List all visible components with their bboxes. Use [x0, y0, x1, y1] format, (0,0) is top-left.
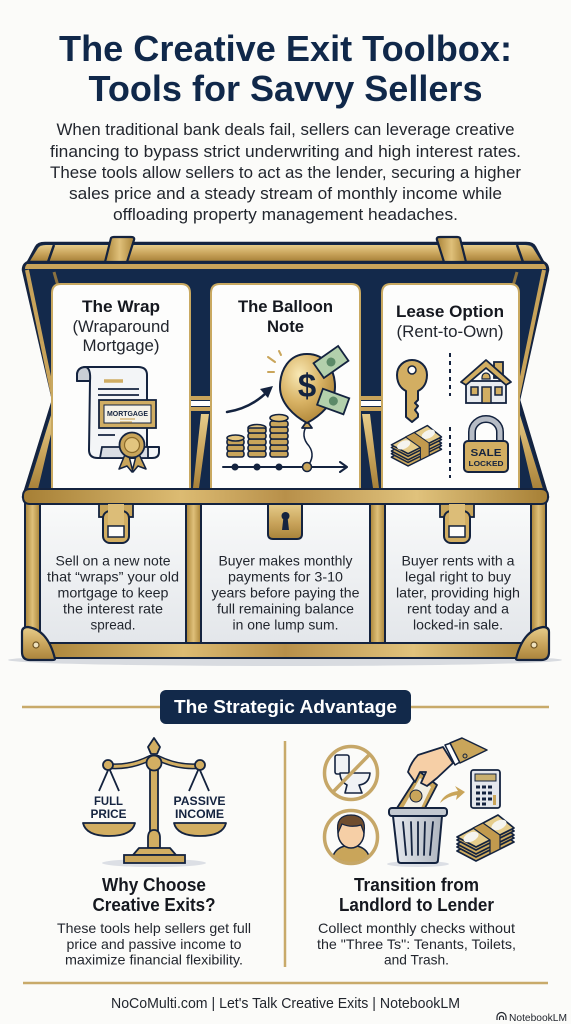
card: the balloon note [211, 284, 360, 491]
text: lease option description [396, 552, 520, 632]
text: the wrap description: mortgage to keep [58, 584, 169, 600]
posts [25, 500, 546, 648]
card heading: The Balloon [238, 297, 333, 316]
text: transition from landlord to lender: and Trash. [384, 952, 449, 968]
icon: house [461, 360, 511, 403]
floor shadow [8, 654, 562, 666]
text: balloon description: payments for 3-10 [228, 568, 343, 584]
rim bar [23, 489, 548, 504]
title [59, 28, 512, 109]
intro paragraph: When traditional bank deals fail, sellers can leverage creative [56, 121, 514, 139]
icon: mortgage scroll: MORTGAGE [107, 409, 148, 418]
icon: balance scale: INCOME [175, 809, 224, 821]
text: balloon description [212, 552, 360, 632]
text: balloon description: years before paying the [212, 584, 360, 600]
intro paragraph: These tools allow sellers to act as the lender, securing a higher [50, 164, 522, 182]
text: lease option description: Buyer rents with a [402, 552, 515, 568]
text: transition from landlord to lender: the "Three Ts": Tenants, Toilets, [317, 936, 516, 952]
text: balloon description: Buyer makes monthly [218, 552, 352, 568]
card: lease option [382, 284, 519, 491]
text: the wrap description: spread. [90, 616, 136, 632]
text: lease option description: rent today and a [407, 600, 509, 616]
text: transition from landlord to lender [317, 875, 516, 968]
text: transition from landlord to lender: Transition from [354, 875, 479, 895]
intro paragraph: sales price and a steady stream of monthly income while [69, 185, 502, 203]
hasp left [99, 504, 133, 543]
card: the wrap [52, 284, 190, 491]
treasure chest toolbox [8, 237, 562, 666]
icon: mortgage scroll [77, 367, 159, 472]
text: balloon description: full remaining balance [217, 600, 354, 616]
column divider [284, 741, 286, 967]
footer text: NoCoMulti.com | Let's Talk Creative Exits | NotebookLM [111, 995, 460, 1012]
lid bracing right [360, 396, 382, 488]
title: The Creative Exit Toolbox: [59, 28, 512, 69]
text: why choose creative exits [57, 875, 251, 968]
icon: balance scale: PASSIVE [174, 796, 226, 808]
icon: arrow to calculator [440, 786, 465, 803]
text: the wrap description [47, 552, 179, 632]
card heading: The Wrap [82, 297, 160, 316]
icon: hand dropping bill into trash [387, 738, 487, 867]
corner left [22, 627, 55, 660]
section heading: the strategic advantage: The Strategic Advantage [174, 697, 397, 717]
icon: no toilet [324, 746, 378, 800]
footer divider [23, 982, 548, 984]
icon: balance scale: PRICE [90, 809, 127, 821]
lid hinge left [105, 237, 134, 262]
icon: balance scale [83, 738, 226, 867]
card heading [396, 302, 504, 341]
text: balloon description: in one lump sum. [232, 616, 338, 632]
card heading: Mortgage) [82, 336, 160, 355]
icon: balloon with growth chart [223, 346, 349, 472]
text: why choose creative exits: price and passive income to [66, 936, 242, 952]
intro paragraph [50, 121, 522, 224]
chest base [8, 489, 562, 666]
icon: balloon with growth chart: $ [298, 367, 316, 404]
text: lease option description: locked-in sale. [413, 616, 503, 632]
card heading: Lease Option [396, 302, 504, 321]
lid hinge right [437, 237, 466, 262]
title: Tools for Savvy Sellers [88, 68, 482, 109]
text: lease option description: legal right to buy [405, 568, 511, 584]
text: the wrap description: Sell on a new note [56, 552, 171, 568]
text: why choose creative exits: Why Choose [102, 875, 206, 895]
icon: cash stack [457, 815, 514, 861]
text: why choose creative exits: These tools help sellers get full [57, 920, 251, 936]
chest lid [23, 237, 548, 497]
hasp right [440, 504, 474, 543]
icon: sale locked padlock: LOCKED [468, 459, 504, 468]
lid bracing left [190, 396, 211, 488]
card heading: (Rent-to-Own) [396, 322, 504, 341]
card heading: Note [267, 317, 304, 336]
text: transition from landlord to lender: Collect monthly checks without [318, 920, 515, 936]
divider dashed [449, 353, 451, 478]
section heading: the strategic advantage [22, 690, 549, 724]
icon: key [397, 360, 427, 422]
icon: cash stack [391, 426, 442, 466]
icon: sale locked padlock: SALE [470, 447, 502, 459]
watermark: NotebookLM [509, 1012, 567, 1024]
center keyhole lock [268, 504, 302, 539]
card heading: (Wraparound [72, 317, 170, 336]
front panels [39, 503, 533, 645]
text: the wrap description: that “wraps” your old [47, 568, 179, 584]
card heading [72, 297, 170, 355]
card heading [238, 297, 333, 336]
icon: calculator [471, 770, 500, 808]
text: why choose creative exits: maximize financial flexibility. [65, 952, 243, 968]
bottom bar [30, 643, 541, 658]
text: lease option description: later, providing high [396, 584, 520, 600]
icon: balance scale: FULL [94, 796, 123, 808]
text: transition from landlord to lender: Landlord to Lender [339, 895, 494, 915]
corner right [516, 627, 549, 660]
icon: tenant [324, 810, 378, 864]
intro paragraph: financing to bypass strict underwriting and high interest rates. [50, 143, 521, 161]
text: the wrap description: the interest rate [63, 600, 163, 616]
icon: sale locked padlock [464, 419, 508, 472]
intro paragraph: offloading property management headaches. [113, 206, 458, 224]
text: why choose creative exits: Creative Exits? [92, 895, 216, 915]
